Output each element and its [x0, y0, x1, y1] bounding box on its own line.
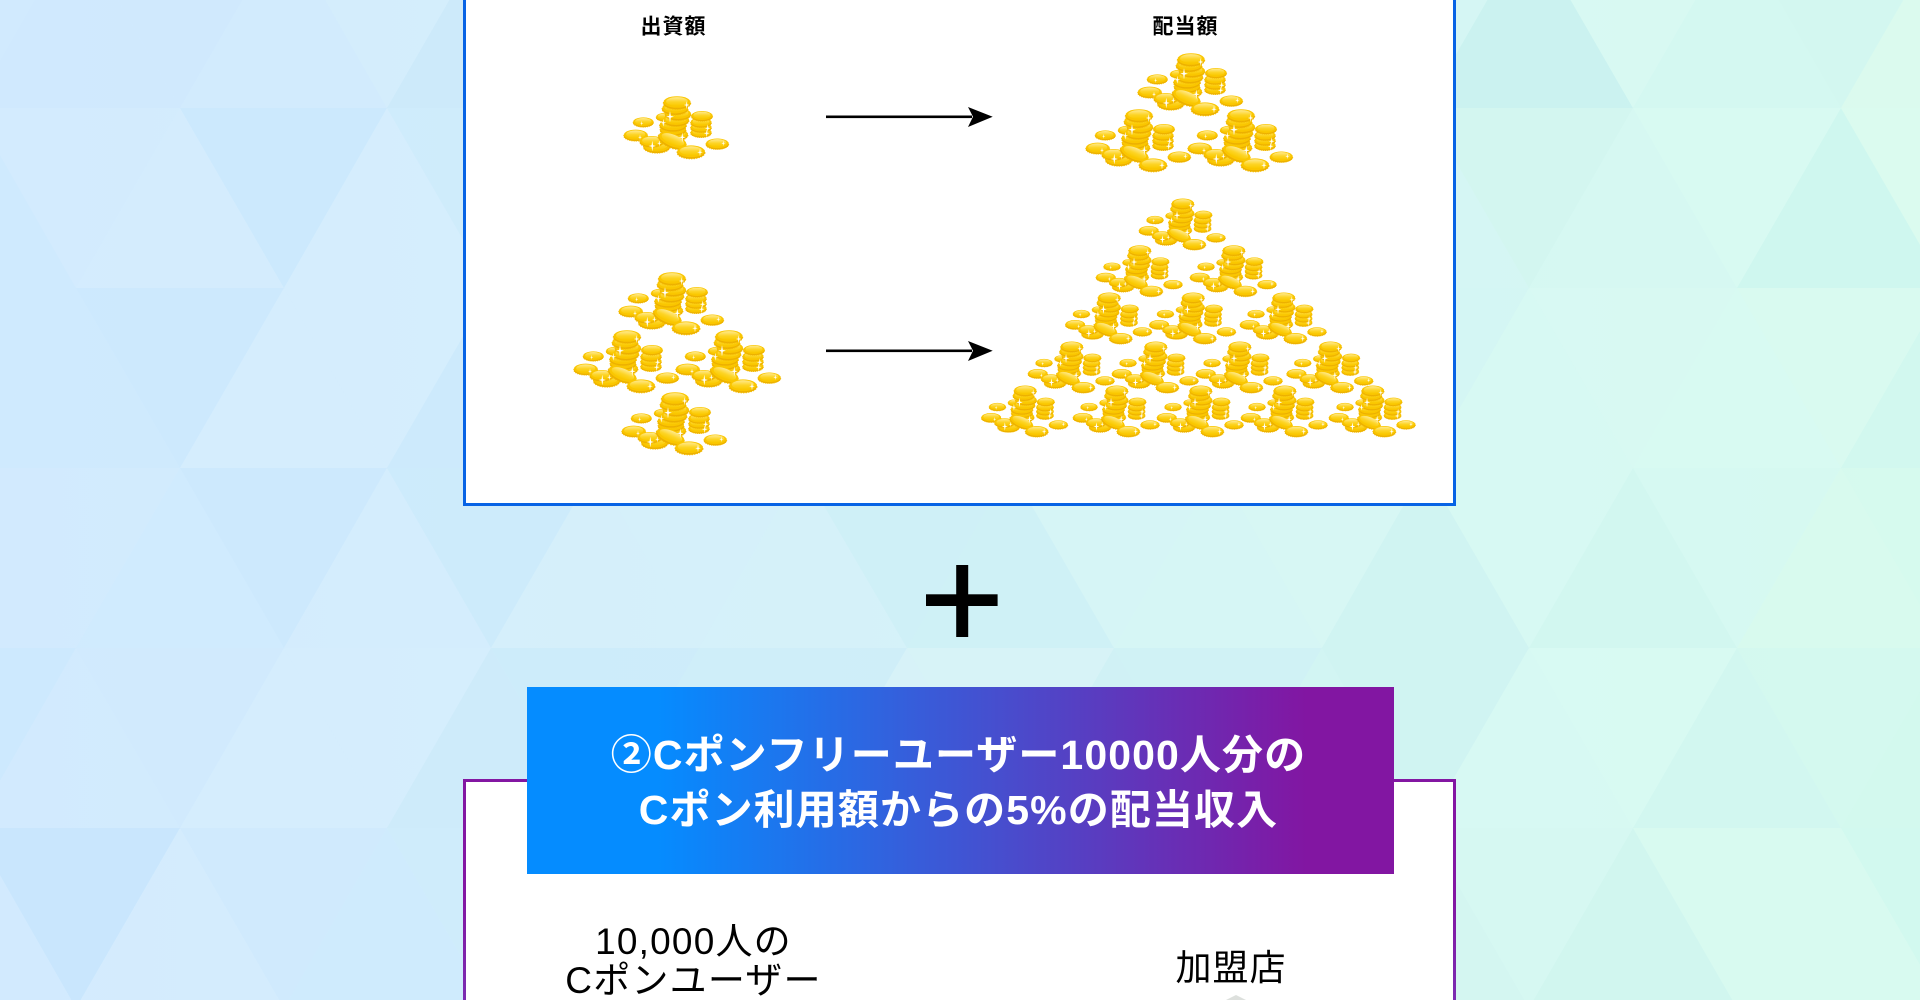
- heading: dividend amount: 配当額: [1152, 16, 1218, 38]
- banner: section heading ②: Cポン利用額からの5%の配当収入: [639, 787, 1278, 833]
- panel: ① investment to dividend: [463, 0, 1456, 506]
- banner: section heading ②: [527, 687, 1394, 874]
- banner: section heading ②: ②Cポンフリーユーザー10000人分の: [611, 732, 1306, 778]
- text: 10,000 C-Pon users: [565, 921, 822, 1000]
- arrow: bottom row: [826, 341, 993, 361]
- text: 10,000 C-Pon users: 10,000人の: [595, 921, 792, 962]
- panel: ② C-Pon free user dividend: [463, 779, 1456, 1000]
- icon: pyramid of fifteen coin piles: [981, 199, 1415, 437]
- icon: plus sign: [926, 565, 998, 637]
- arrow: top row: [826, 107, 993, 127]
- text: member stores: 加盟店: [1175, 947, 1286, 988]
- icon: one coin pile: [624, 96, 729, 159]
- icon: four coin piles: [574, 272, 781, 455]
- icon: store roof tip (cropped): [1226, 995, 1246, 1000]
- icon: three coin piles: [1086, 53, 1293, 172]
- heading: investment amount: 出資額: [640, 16, 706, 38]
- text: 10,000 C-Pon users: Cポンユーザー: [565, 960, 822, 1000]
